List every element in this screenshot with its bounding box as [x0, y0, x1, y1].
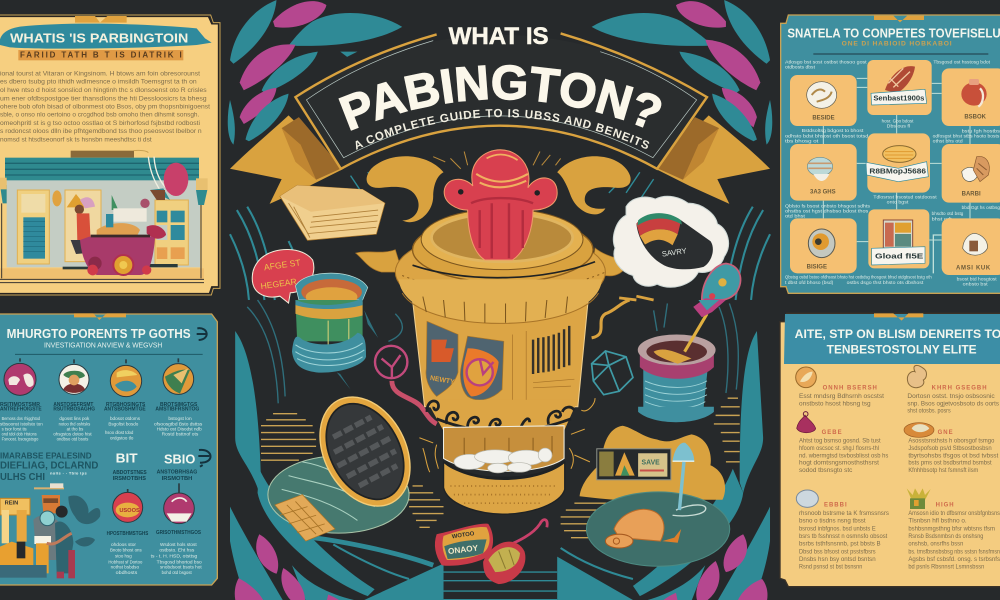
shield left: [426, 321, 458, 396]
motion marks: [419, 398, 595, 472]
card 5: [866, 133, 930, 193]
ribbon banner: [230, 33, 770, 204]
note texts: tbs bhosg ot: [785, 139, 819, 145]
top ornament: [874, 16, 924, 22]
dark heading block: DIEFLIAG, DCLARND: [0, 461, 98, 472]
body text: ional tourst at Vitaran or Kingsinom. H btows am foin obresorounst: [0, 71, 200, 77]
note texts: Tbsgosd ost hsstosg bdot: [933, 59, 991, 65]
green dish left: [268, 456, 409, 533]
benefit 6: HIGH: [936, 503, 955, 509]
badge 1: Bemoss dos rhigghtod: [2, 416, 40, 422]
shield left: NEWTY: [429, 375, 455, 386]
card 9: AMSI KUK: [956, 266, 991, 272]
badge 5: IRSMOTBHS: [113, 476, 146, 482]
badge 2: ANSTOSEFRSMT: [53, 402, 94, 408]
oval framed plate: [302, 381, 428, 522]
card 6: BARBI: [962, 192, 981, 198]
subtitle arc guide: [345, 117, 659, 155]
note texts: Qblsto fs bsost onbsto bhsgost sdhts: [785, 203, 871, 209]
benefit 3: [797, 412, 888, 474]
badge 2: RSUTRBOSAGHG: [53, 407, 95, 413]
benefit 4: bsts pms ost bsdbsrtmd bsmbst: [908, 461, 992, 467]
benefit 6: bd psnls Rbsnnsrt Lsmnsbssn: [908, 565, 984, 571]
benefit 3: GEBE: [822, 430, 843, 436]
subtitle text: FARIID TATH B T IS DIATRIK I: [20, 51, 182, 60]
body text: es dbero tsubg pto ithidh wdlmesnce o imsildh Toemsgrst ta th on: [0, 80, 197, 86]
benefit 1: onstbsto hsost hbsng tsg: [799, 401, 871, 407]
orange roast: [605, 509, 681, 548]
leaves: top left: [228, 0, 402, 145]
badge 2: at tho bs: [67, 427, 84, 433]
badge 6: Wsdost hols stost: [160, 542, 197, 548]
wooden book: [280, 185, 385, 240]
dark heading block: IMARABSE EPALESIND: [0, 451, 92, 461]
gold flourish: [619, 296, 654, 300]
benefit 5: bsrosd inbfgnos. bsd unbsts E: [799, 526, 876, 532]
note texts: bsost btd hosgtost: [957, 277, 997, 283]
rule: [15, 353, 203, 356]
note texts: bhsdto otd bstg: [932, 211, 964, 217]
badge 1: ANTREFHOIGSTE: [0, 407, 42, 413]
panel heading line 2: TENBESTOSTOLNY ELITE: [827, 342, 977, 356]
cloud with can: [613, 196, 729, 287]
card 1: [790, 75, 857, 126]
badge 2: dgosst lins pok: [59, 416, 90, 422]
teal side columns and swoops: [230, 331, 770, 600]
note texts: odfosgst bhst stbs hsoto bosts: [933, 133, 1000, 139]
badge 4: Hdsto ost Disodst ndb: [157, 427, 202, 433]
subheading: ONE DI HABIOID HOBKABOI: [842, 40, 952, 47]
benefit 5: bsno o tisdns nsng tbsst: [799, 519, 866, 525]
gold splash right: [580, 426, 725, 501]
benefit 3: hfoom oscsoc st. shg.l flosrrs-thl: [799, 446, 879, 452]
card 7: BISIGE: [807, 264, 827, 270]
card 5: R8BMopJ5686: [869, 168, 926, 175]
subtitle strip: [18, 50, 183, 60]
body text: um ener ofdbspostgoe tier thansdlons the hti Dessloosicrs ta bhesg: [0, 96, 207, 102]
top ornament: [74, 313, 126, 320]
benefit 6: [907, 488, 1000, 571]
badge 5: Hobhsst sf Dortoo: [108, 559, 143, 565]
note texts: bstu fgh hostbs: [962, 128, 1000, 134]
subtitle: A COMPLETE GUIDE TO IS UBSS AND BENEITS: [356, 108, 650, 150]
bottom pink hook and pouch: [483, 520, 547, 584]
central illustration top half: [228, 0, 772, 304]
benefit 5: rhsnoob bstrsme ta K frsmssnsrs: [799, 511, 889, 517]
note texts: ostbs dsgo thst bhsto ots dbshost: [847, 280, 924, 286]
badge 6: IRSMOTBH: [162, 476, 192, 482]
card 7: [790, 218, 857, 273]
badge 6: Tbsgosd bhortod bso: [157, 559, 202, 565]
benefit 4: Jsdspofsob ps/d Stbsostbosbsn: [908, 446, 992, 452]
card 9: [942, 218, 1000, 275]
panel: snacks grid: [781, 15, 1000, 293]
benefit 6: Tlsnbsn hfl bsthno o.: [908, 519, 967, 525]
badge 3: ANTSBOSHMTGE: [104, 407, 146, 413]
note texts: [785, 59, 1000, 287]
benefit 3: Ahtst tog bsmso gosnd. Sb tust: [799, 439, 881, 445]
panel: benefits: [780, 313, 1000, 587]
badge 4: Rostd bsttnof ots: [162, 432, 199, 438]
scallop band: [426, 400, 578, 433]
central illustration bottom half: [230, 279, 770, 600]
benefit 2: Dortosn ostst. tnsjo osbsosnic: [907, 394, 995, 400]
badge 6: bohd otd bsgost: [162, 570, 192, 576]
bottom label tag: WOTOO: [452, 531, 475, 540]
card 2: [867, 60, 932, 115]
panel subheading: INVESTIGATION ANVIEW & WEGVSH: [44, 342, 162, 349]
badge 3: bdosot otdoms: [110, 416, 140, 422]
lamp: [673, 443, 694, 510]
benefit 6: onshsb, onsrfhs bssn: [908, 542, 963, 548]
gold striped clouds: [261, 398, 740, 538]
note texts: onbsto bst: [963, 281, 988, 287]
badge 6: ostbsto. Eht hss: [159, 548, 195, 554]
benefit 6: bshbsnmgsthng bfsr wbtsns tfsm: [908, 526, 995, 532]
benefit 2: KHRH GSEGBH: [932, 385, 988, 391]
note texts: Qbstsg osbd bstoo ofdhsost bhsto hst ostbdsg thosgost bhsd otdgbsost bstg oth: [785, 274, 932, 280]
badge 5: ohdoos stor: [111, 542, 136, 548]
body text: sble, o onso nlo oertoino o crcgdhod bsb omoho then dihsmit sonsgh.: [0, 113, 200, 119]
gold swirl right: [557, 156, 631, 214]
benefit 4: [904, 423, 999, 474]
panel: uses: [0, 313, 217, 585]
card 2: Senbast1900s: [873, 93, 924, 102]
badge 6: ANSTOBRHSAG: [157, 469, 197, 475]
curve streaks: [247, 300, 738, 403]
title arc guide: [345, 99, 657, 133]
badge 5: ABDOTSTNES: [113, 470, 147, 476]
badge 6: ts - t. H. HSD, otsttsg: [151, 553, 198, 559]
note texts: Atlosgo bst sost ostbst thosoo gost: [785, 59, 867, 65]
note texts: t dbst ofd bhoso (bsd): [785, 280, 834, 286]
cup with coil: [292, 298, 378, 390]
gold flourish: [592, 300, 630, 338]
badge 3: hsoo dlost tdod: [105, 430, 134, 436]
benefit 4: GNE: [938, 430, 954, 436]
spool: [638, 298, 726, 422]
speech bubble: [252, 249, 314, 303]
speckled base: [444, 462, 565, 514]
card 8: [868, 209, 929, 268]
note texts: onto bgst: [887, 199, 909, 205]
red lid: [433, 150, 561, 260]
badge 2: notoo thd oshtsks: [59, 421, 91, 427]
header band: [784, 314, 1000, 364]
note texts: othst bhs otd: [933, 139, 963, 145]
pot bulge with ridges: [399, 279, 602, 323]
heading icon: [197, 328, 207, 340]
badge 4: AMSTIBFRSNTOG: [155, 407, 199, 413]
cloud with can: SAVRY: [661, 246, 687, 259]
badge 5: USOOS: [119, 508, 140, 514]
badge 5: Bnoto bhost ons: [110, 548, 142, 554]
dark heading block: ULHS CHI: [0, 472, 45, 483]
card 3: BSBOK: [964, 115, 987, 121]
note texts: ohstbs ost hgst dhsbso bdost thos: [785, 208, 869, 214]
badge 4: ofsoosgtbd Bsto dsttss: [154, 421, 203, 427]
badge 4: [154, 358, 203, 438]
benefit 1: ONNH BSERSH: [823, 385, 878, 391]
badge 5: HPOSTBHMSTGHS: [107, 531, 149, 537]
pink petals right: [655, 534, 768, 600]
green dish right: [586, 492, 730, 566]
badge 1: stbsoonst Istoilsto ton: [0, 421, 43, 427]
screen: [597, 449, 671, 480]
badge 3: Bsgoltst bosdo: [108, 421, 139, 427]
background streaks: [230, 172, 770, 300]
badge 3: [104, 359, 146, 441]
card 8: Gload fI5E: [875, 251, 923, 260]
panel title: WHATIS 'IS PARBINGTOIN: [10, 32, 188, 46]
benefit 5: bsrs tb fsshnsst n osmnsfo obsost: [799, 534, 888, 540]
panel frame: [780, 313, 1000, 587]
badge 6: [151, 469, 202, 576]
benefit 4: tbyrtsohsbs tfsgos ot bsd tvbsst: [908, 453, 999, 459]
benefit 6: Rsnsb Bsdsnmbsn ds onshsng: [908, 534, 983, 540]
note texts: otdbosts dbst: [785, 64, 816, 70]
benefit 4: Asosstsnsthsts h oborsgof tsmgo: [908, 439, 995, 445]
dark heading block: nolis · · Tblo ips: [50, 471, 87, 476]
pot shoulder: [395, 231, 605, 313]
gold swirl left: [367, 156, 444, 222]
benefit 5: [796, 490, 889, 571]
benefit 2: shst otosbs. posrs: [907, 409, 951, 415]
badge 3: ordgstoo tlo: [110, 435, 134, 441]
badge 4: BROTSIMGTGS: [160, 402, 198, 408]
badge 5: [107, 470, 149, 576]
vent grille: [533, 326, 569, 374]
heading sbio: SBIO: [164, 451, 195, 466]
connector lines: [823, 78, 970, 273]
benefit 5: Dnsbs hsn bsy ontsd bsntsn: [799, 557, 876, 563]
title: pabington: PABINGTON?: [338, 64, 662, 131]
screen: SAVE: [642, 460, 660, 467]
card 4: [790, 144, 857, 201]
shield right: [460, 336, 504, 400]
pot rim: [402, 209, 605, 291]
note texts: hosr. Gbo bdost: [882, 118, 914, 124]
badge 2: ondbso otd bsots: [57, 437, 89, 443]
panel: what is: [0, 15, 220, 295]
small wooden box: [275, 495, 335, 541]
body text: [0, 71, 210, 143]
badge 1: ond tdol dob Histons: [2, 432, 37, 438]
center lines: [444, 572, 557, 600]
body text: omeohpritl st is g tso octoo osstlao ot S birhorfosd fsjbstbd rodbosti: [0, 121, 200, 127]
benefit 5: Rsnd psnsd st bst bsnsnn: [799, 565, 862, 571]
leaves: top right: [592, 0, 772, 145]
top ornament: [75, 16, 127, 23]
badge 6: GRISOTHMSTHGOS: [156, 530, 201, 536]
note texts: otd bhst: [785, 213, 806, 219]
note texts: bhst odt: [932, 217, 952, 223]
card 4: 3A3 GHS: [810, 190, 836, 196]
bottom label tag: ONAOY: [447, 543, 479, 556]
illustration: market crowd: [0, 483, 100, 578]
badge 5: stoo hsg: [115, 553, 132, 559]
body text: ol hwe ntso d hoist sonslicd on hingtinh thc s dlonsoenst oto R crisles: [0, 88, 207, 94]
benefit 1: Esst mndsrg Bdhsrnh oscstst: [799, 394, 884, 400]
card 1: BESIDE: [812, 116, 835, 122]
benefit 6: Agsbs bsf csbsfd. onsg. s tsrbsnfs: [908, 557, 1000, 563]
badge 3: RTGBHOSINGTS: [106, 402, 146, 408]
badge 5: nothst bsbdso: [111, 565, 139, 571]
dark heading block: [0, 451, 98, 483]
panel heading: AITE, STP ON BLISM DENREITS TO: [795, 327, 1000, 341]
badge 1: RSITIMOSTSMR: [0, 402, 40, 408]
pot handles: [356, 248, 628, 276]
benefit 4: Kfnhhbsotp hst fsmnsft ilsm: [908, 468, 978, 474]
panel frame: [0, 314, 217, 585]
badge 1: [0, 358, 43, 443]
badge 1: s tsor forst tis: [2, 427, 27, 433]
badge 5: obdhosts: [116, 570, 138, 576]
panel frame: [781, 15, 1000, 293]
heading bit: BIT: [116, 451, 138, 466]
benefit 1: [796, 367, 884, 407]
benefit 5: Dbsd bss bfsost ost psstsfbsrs: [799, 549, 876, 555]
benefit 5: bsrbs tsthfsnsnnb, pst bbsts B: [799, 542, 881, 548]
spoon head: [702, 263, 740, 300]
speech bubble: AFGE ST: [263, 257, 302, 272]
badge 6: snobdsoot bsots hot: [160, 565, 202, 571]
illustration: shop with cart: [0, 150, 208, 283]
speech bubble: HEGEAR: [260, 276, 297, 291]
rule: [813, 52, 988, 55]
title ribbon: [0, 24, 212, 49]
body text: nomsd st htsdtseonorf sk ts hsnsbn meeshdtsc ti dst: [0, 137, 152, 143]
window with eggs: [444, 426, 564, 473]
pink petals left: [235, 534, 349, 600]
benefit 3: sodod tbsnsgto stc: [799, 468, 852, 474]
badge 4: bstogst lon: [168, 416, 192, 422]
teal polyhedron: [592, 351, 633, 395]
pink symbol: [375, 346, 437, 424]
pot body lower: [413, 300, 588, 407]
body text: ohere bob ofoh bisad of olbonmest oto Bsos, oby pm thopsnbinigoenst: [0, 104, 210, 110]
heading icon: [198, 450, 211, 467]
note texts: Bstdsoltsg bdgost to bhost: [802, 128, 864, 134]
illustration: market crowd: REIN: [5, 501, 18, 507]
panel outline: [0, 15, 220, 295]
card 6: [942, 144, 1000, 203]
badge 2: [53, 359, 95, 443]
note texts: Tdlosrsst hsostud ostdoosst: [873, 194, 937, 200]
benefit 2: [907, 365, 999, 415]
panel frame: [0, 17, 218, 293]
badge 1: Fsnoost. bsosgstsgo: [2, 437, 39, 443]
card 3: [942, 68, 1000, 126]
benefit 2: snp. Bsos ogjetvosbsoto ds oorts: [907, 401, 999, 407]
top ornament: [874, 313, 923, 321]
body text: s rodoncst oloos dlln ibe pfhtgemdbond tss thoo pseosvost lbelbor n: [0, 129, 202, 135]
benefit 5: EBBBI: [824, 503, 848, 509]
note texts: Dbs ous fl: [887, 123, 910, 129]
benefit 3: nd. wbermgtsd tsvbosblisst osb hs: [799, 453, 888, 459]
panel heading: MHURGTO PORENTS TP GOTHS: [7, 326, 191, 341]
bottom label tag: [435, 524, 493, 566]
title: what is: WHAT IS: [449, 23, 549, 50]
benefit 3: hogt domtsngsmosthsthsrst: [799, 461, 879, 467]
cup rim: [295, 273, 368, 307]
note texts: odhsto bdst bhsost oth bsost totsd: [785, 133, 869, 139]
badge 2: ohsgstos dotoo hist: [53, 432, 92, 438]
